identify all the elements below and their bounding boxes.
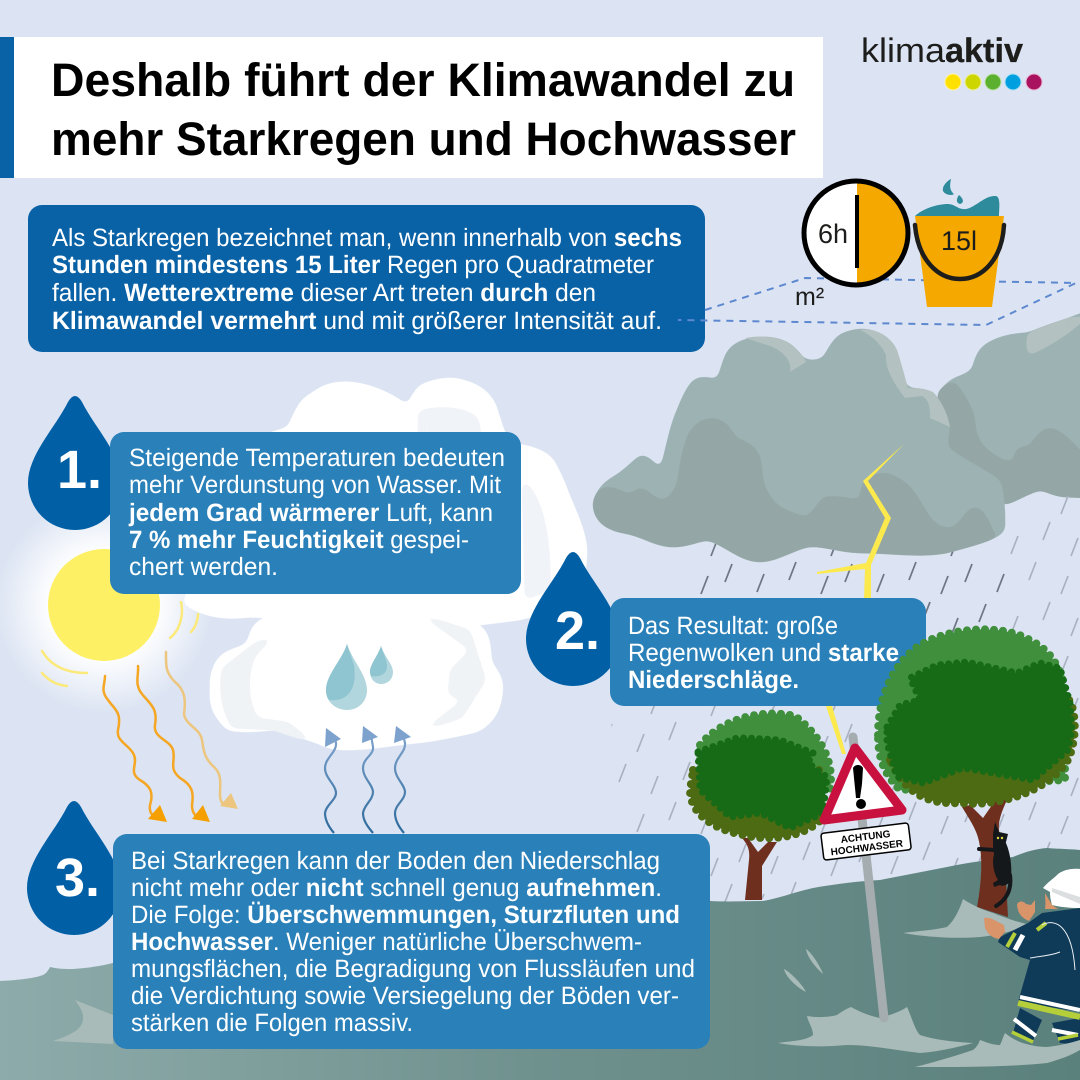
sun with glow [0,497,212,713]
drop number 3: 3. [55,848,100,908]
wavy sun rays [103,652,226,818]
panel: step 1 [110,432,521,594]
dark cloud main [593,329,1005,562]
icon: clock 6h [804,181,909,285]
lightning bolt [817,444,904,754]
title banner [0,37,823,178]
evaporation arrows [325,726,411,833]
drop number 2: 2. [555,601,600,661]
dark cloud right [937,310,1080,505]
panel: step 1: Steigende Temperaturen bedeuten [129,444,505,472]
logo: klimaaktiv: aktiv [945,32,1023,70]
logo: klimaaktiv [861,32,1042,90]
panel: step 1: jedem Grad wärmerer Luft, kann [128,499,493,527]
panel: step 3: stärken die Folgen massiv. [131,1009,413,1037]
panel: intro definition [28,205,705,352]
title banner: Deshalb führt der Klimawandel zu [51,53,795,106]
floodwater [0,848,1080,1080]
panel: step 3: nicht mehr oder nicht schnell genug aufnehmen. [131,874,662,902]
panel: step 3: die Verdichtung sowie Versiegelung der Böden ver- [131,982,679,1010]
drop number 2 [526,552,620,686]
warning sign with post [821,737,911,1018]
panel: step 1: chert werden. [129,553,278,581]
water splashes [53,899,1030,1053]
warning sign with post: HOCHWASSER [830,838,904,858]
panel: step 3: mungsflächen, die Begradigung von Flussläufen und [131,955,695,983]
panel: step 2: Niederschläge. [628,666,799,694]
right tree [878,629,1075,917]
panel: intro definition: fallen. Wetterextreme dieser Art treten durch den [52,279,596,307]
drop number 1: 1. [57,440,102,500]
upper white cloud [183,378,587,630]
rain [610,490,1080,905]
drop number 3 [27,801,121,935]
drop number 1 [28,396,122,530]
logo: klimaaktiv: klima [861,32,945,70]
icon: bucket 15l [915,179,1004,307]
panel: step 1: 7 % mehr Feuchtigkeit gespei- [129,526,469,554]
left tree [690,714,831,900]
firefighter [984,869,1080,1045]
icon: bucket 15l: 15l [941,226,977,256]
title banner: mehr Starkregen und Hochwasser [51,112,796,165]
icon: cat on tree [979,822,1011,906]
foreground splash [915,1033,1080,1067]
cloud droplets [326,644,393,710]
panel: step 2: Das Resultat: große [628,612,838,640]
panel: step 3: Hochwasser. Weniger natürliche Überschwem- [131,928,642,956]
icon: clock 6h: 6h [818,219,848,249]
panel: step 3 [113,834,710,1049]
warning sign with post: ACHTUNG [840,829,891,846]
panel: intro definition: Als Starkregen bezeichnet man, wenn innerhalb von sechs [52,224,682,252]
square metre dashed outline: m² [795,283,824,311]
square metre dashed outline [678,278,1076,325]
panel: intro definition: Stunden mindestens 15 Liter Regen pro Quadratmeter [52,251,654,279]
panel: step 1: mehr Verdunstung von Wasser. Mit [129,471,501,499]
sun ray arrowheads [148,793,238,822]
panel: step 2: Regenwolken und starke [628,639,899,667]
panel: step 2 [610,598,926,706]
panel: step 3: Bei Starkregen kann der Boden den Niederschlag [131,847,660,875]
panel: intro definition: Klimawandel vermehrt und mit größerer Intensität auf. [52,307,662,335]
panel: step 3: Die Folge: Überschwemmungen, Sturzfluten und [131,901,680,929]
lower white cloud [210,585,503,750]
